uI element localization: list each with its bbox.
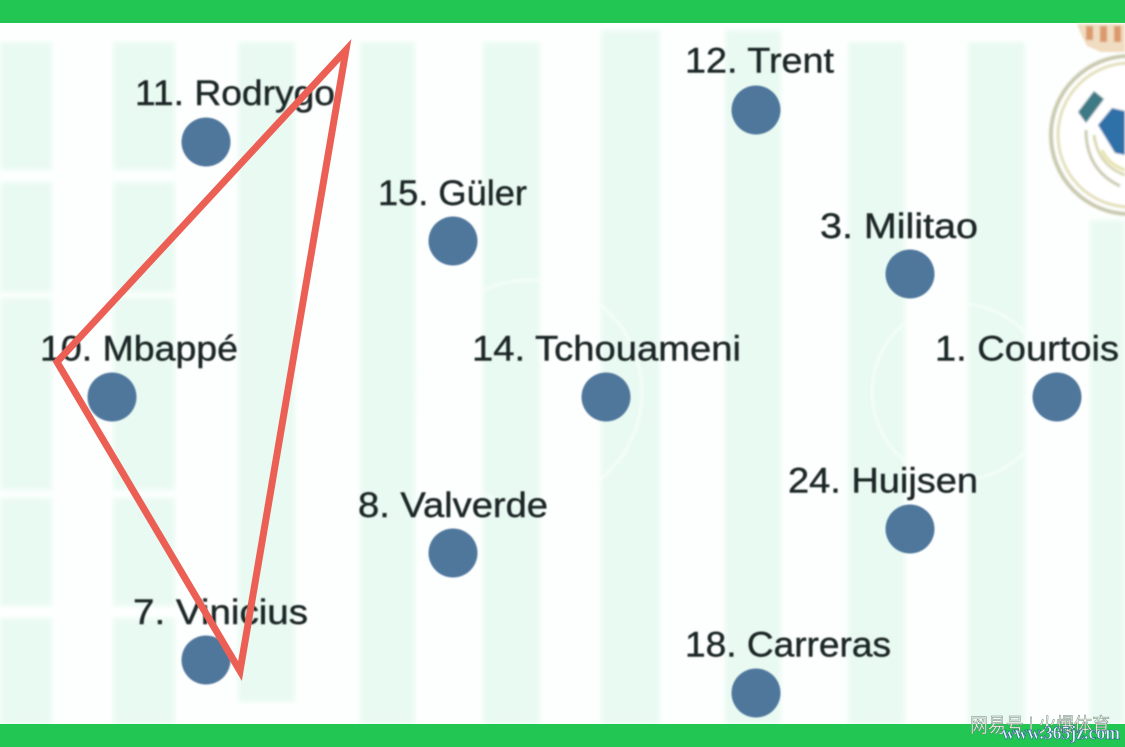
watermark: 网易号 | 火爆体育 <box>970 714 1110 737</box>
bottom green bar <box>0 724 1125 747</box>
player: 15. Güler: 15. Güler <box>378 174 527 213</box>
player: 1. Courtois: 1. Courtois <box>935 330 1119 368</box>
player: 8. Valverde <box>358 486 548 578</box>
player: 7. Vinicius: 7. Vinicius <box>133 593 308 632</box>
player: 10. Mbappé <box>40 330 238 422</box>
player: 11. Rodrygo <box>135 74 335 166</box>
player: 15. Güler <box>378 174 527 266</box>
centre circle <box>418 280 642 504</box>
red triangle highlight <box>57 50 346 671</box>
player: 11. Rodrygo: 11. Rodrygo <box>135 74 335 113</box>
player: 24. Huijsen: 24. Huijsen <box>788 462 978 500</box>
goal arc <box>872 304 1048 480</box>
player: 7. Vinicius <box>133 593 308 684</box>
watermark: www.365jz.com <box>1002 723 1120 744</box>
player: 12. Trent: 12. Trent <box>685 42 834 80</box>
player: 14. Tchouameni <box>472 330 741 422</box>
player: 1. Courtois <box>935 330 1119 422</box>
icon: club crest <box>1051 24 1125 214</box>
player: 10. Mbappé: 10. Mbappé <box>40 330 238 368</box>
player: 24. Huijsen <box>788 462 978 554</box>
player: 3. Militao: 3. Militao <box>820 207 978 246</box>
player: 18. Carreras <box>685 626 891 718</box>
player: 12. Trent <box>685 42 834 134</box>
player: 3. Militao <box>820 207 978 298</box>
top green bar <box>0 0 1125 23</box>
player: 8. Valverde: 8. Valverde <box>358 486 548 525</box>
player: 18. Carreras: 18. Carreras <box>685 626 891 664</box>
player: 14. Tchouameni: 14. Tchouameni <box>472 330 741 368</box>
